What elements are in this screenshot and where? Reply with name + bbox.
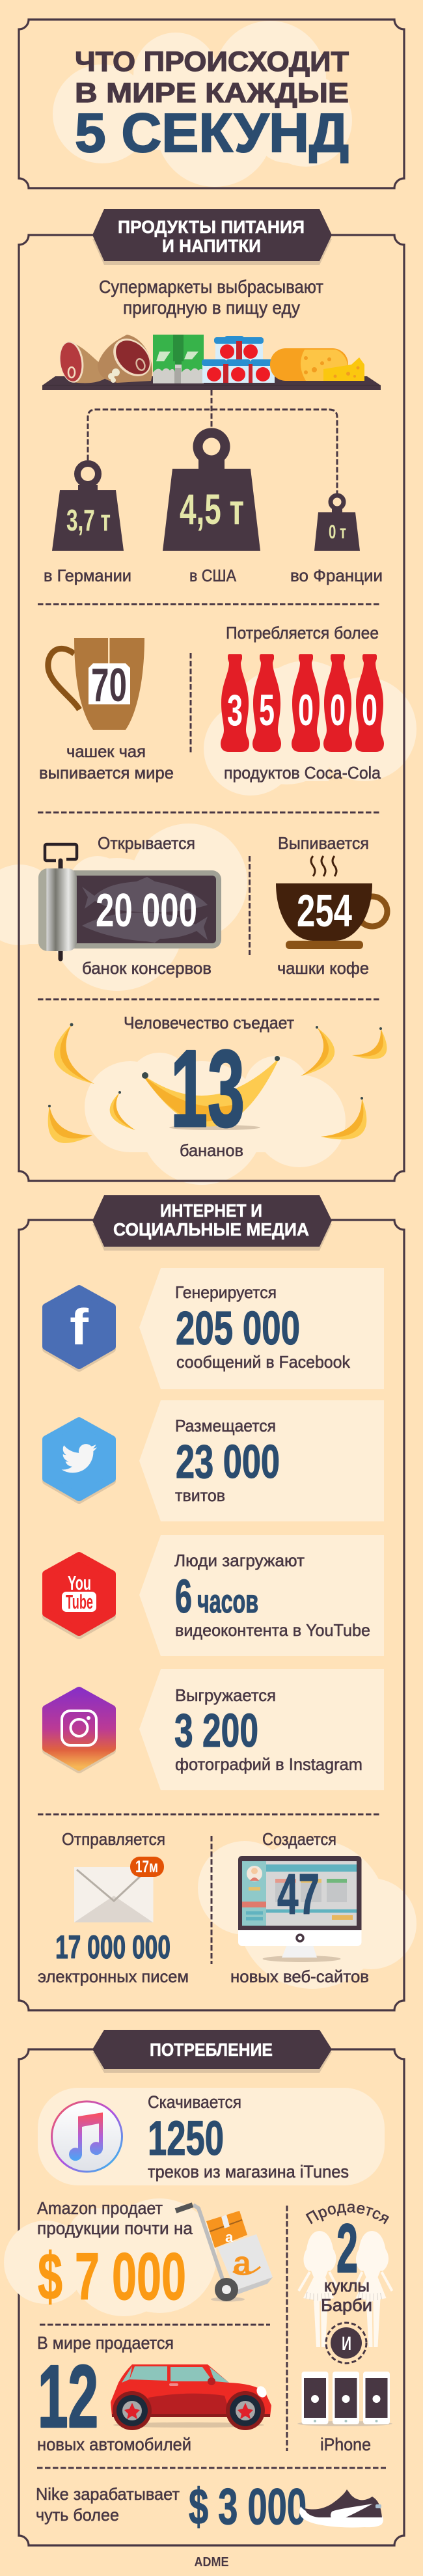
icon: and badge: И <box>342 2333 351 2355</box>
icon: coffee cup: 254 <box>297 885 352 936</box>
panel: internet and social media <box>19 1195 416 2010</box>
backdrop cloud: amazon <box>4 2198 217 2316</box>
amazon text <box>37 2198 193 2238</box>
itunes text: 1250 <box>148 2111 224 2165</box>
section heading: СОЦИАЛЬНЫЕ МЕДИА <box>113 1219 309 1240</box>
icon: cola bottles with digits: 3 <box>227 686 243 735</box>
panel: itunes <box>38 2088 385 2185</box>
icon: facebook <box>46 1289 112 1368</box>
email text: электронных писем <box>38 1967 189 1986</box>
credit: ADME: ADME <box>194 2555 229 2569</box>
barbie number: 2 <box>336 2210 358 2287</box>
icon: big banana <box>142 1056 280 1130</box>
icon: weight France <box>314 495 360 551</box>
cars text: новых автомобилей <box>37 2435 191 2454</box>
number 12: 12 <box>38 2347 98 2446</box>
icon: right doll <box>354 2231 392 2347</box>
icon: youtube: Tube <box>66 1590 93 1613</box>
facebook text <box>175 1282 351 1372</box>
banana heading: Человечество съедает <box>124 1013 294 1032</box>
icon: ham left <box>57 340 111 384</box>
amazon text: продукции почти на <box>37 2219 193 2238</box>
icon: envelope with badge <box>74 1857 164 1922</box>
instagram text: фотографий в Instagram <box>175 1754 362 1774</box>
amazon text: Amazon продает <box>37 2198 163 2218</box>
panel: food and drinks <box>0 209 416 1185</box>
instagram text: Выгружается <box>175 1685 276 1705</box>
nike text: Nike зарабатывает <box>36 2484 180 2504</box>
youtube text: 6 <box>175 1571 192 1623</box>
icon: red car <box>111 2364 271 2430</box>
section frame <box>19 235 404 1181</box>
icon: tea cup <box>48 638 144 730</box>
icon: cola bottles with digits: 0 <box>298 686 314 735</box>
panel: facebook <box>46 1268 384 1389</box>
barbie text: куклы <box>324 2276 370 2295</box>
facebook text: сообщений в Facebook <box>176 1352 351 1372</box>
weight labels: во Франции <box>290 566 383 585</box>
intro text: пригодную в пищу еду <box>123 298 300 318</box>
section frame <box>19 1220 404 2010</box>
icon: weight USA <box>163 433 260 551</box>
coffee text: чашки кофе <box>277 958 369 978</box>
icon: amazon cart: a <box>233 2245 252 2281</box>
icon: amazon cart <box>176 2205 273 2302</box>
facebook text: Генерируется <box>175 1282 277 1302</box>
icon: iphones <box>297 2372 392 2426</box>
icon: itunes <box>52 2101 122 2172</box>
icon: monitor <box>238 1856 362 1962</box>
dashed scale connector <box>88 390 337 493</box>
weight labels: в Германии <box>44 566 131 585</box>
icon: cola bottles with digits: 0 <box>362 686 377 735</box>
weight labels: в США <box>189 566 237 585</box>
itunes text: Скачивается <box>148 2092 241 2112</box>
icon: shelf with food <box>42 331 381 390</box>
cola heading: Потребляется более <box>226 623 379 643</box>
title text: В МИРЕ КАЖДЫЕ <box>75 77 349 109</box>
tea text: выпивается мире <box>39 763 174 782</box>
icon: monitor: 47 <box>277 1862 320 1926</box>
section heading: И НАПИТКИ <box>162 236 261 256</box>
cars heading: В мире продается <box>37 2333 174 2353</box>
icon: coffee cup <box>276 856 387 949</box>
weight labels <box>44 566 383 585</box>
section heading: ПОТРЕБЛЕНИЕ <box>150 2040 273 2060</box>
email number: 17 000 000 <box>55 1929 171 1965</box>
icon: barbie silhouettes <box>299 2231 392 2347</box>
icon: cola bottles with digits: 5 <box>259 686 275 735</box>
icon: twitter <box>46 1421 112 1500</box>
intro text <box>99 277 323 318</box>
icon: youtube: You <box>68 1572 91 1594</box>
twitter text <box>175 1416 280 1505</box>
cans heading: Открывается <box>98 833 195 853</box>
icon: facebook: f <box>70 1298 89 1355</box>
twitter text: 23 000 <box>176 1436 280 1488</box>
icon: milk carton <box>153 335 204 383</box>
section heading: ПРОДУКТЫ ПИТАНИЯ <box>118 217 305 237</box>
icon: instagram <box>46 1691 112 1769</box>
icon: cheese <box>270 348 364 381</box>
youtube text: часов <box>197 1583 258 1620</box>
backdrop clouds: food section <box>0 661 416 1185</box>
icon: opened tin can: 20 000 <box>96 885 197 937</box>
icon: cola bottles with digits <box>221 654 384 752</box>
title text: 5 СЕКУНД <box>75 102 349 163</box>
icon: small bananas <box>48 1023 387 1143</box>
title panel <box>19 20 404 188</box>
section heading <box>92 2030 332 2073</box>
icon: nike shoe <box>299 2489 383 2527</box>
icon: cans <box>202 336 275 383</box>
panel: consumption <box>4 2030 405 2547</box>
icon: left doll <box>299 2231 338 2347</box>
title cloud backdrop <box>53 21 352 187</box>
icon: envelope with badge: 17м <box>135 1857 158 1876</box>
panel: instagram <box>46 1669 384 1790</box>
youtube text <box>174 1551 370 1640</box>
backdrop cloud: websites <box>198 1839 416 1989</box>
panel: twitter <box>46 1400 384 1521</box>
iphone text: iPhone <box>320 2435 371 2454</box>
title text <box>75 46 349 163</box>
twitter text: Размещается <box>175 1416 276 1435</box>
section heading: ИНТЕРНЕТ И <box>160 1200 262 1221</box>
itunes text <box>148 2092 349 2181</box>
icon: weight France: 0 т <box>329 521 346 543</box>
section frame <box>19 2049 404 2545</box>
icon: ham right <box>98 331 158 383</box>
icon: youtube <box>46 1556 112 1635</box>
nike text <box>36 2484 180 2525</box>
cans text: банок консервов <box>82 958 212 978</box>
icon: and badge <box>326 2323 366 2363</box>
amazon number: $ 7 000 <box>38 2239 186 2314</box>
icon: weight Germany <box>52 464 124 551</box>
instagram text <box>174 1685 362 1774</box>
title text: ЧТО ПРОИСХОДИТ <box>75 46 349 77</box>
youtube text: видеоконтента в YouTube <box>175 1620 370 1640</box>
section heading <box>92 209 332 265</box>
panel: youtube <box>46 1535 384 1656</box>
tea text: чашек чая <box>66 741 146 761</box>
section heading <box>92 1195 332 1251</box>
number 13: 13 <box>171 1027 245 1150</box>
icon: weight USA: 4,5 т <box>180 485 244 533</box>
banana text: бананов <box>180 1141 243 1160</box>
websites heading: Создается <box>262 1829 336 1849</box>
icon: cola bottles with digits: 0 <box>330 686 346 735</box>
barbie text: Барби <box>321 2295 372 2315</box>
intro text: Супермаркеты выбрасывают <box>99 277 323 297</box>
cola text: продуктов Coca-Cola <box>224 763 381 782</box>
coffee heading: Выпивается <box>278 833 369 853</box>
nike text: чуть более <box>36 2505 119 2525</box>
instagram text: 3 200 <box>174 1705 258 1757</box>
facebook text: 205 000 <box>176 1303 300 1355</box>
tea text <box>39 741 174 782</box>
email heading: Отправляется <box>62 1829 165 1849</box>
title frame <box>19 20 404 188</box>
barbie text <box>321 2276 372 2315</box>
itunes text: треков из магазина iTunes <box>148 2162 349 2181</box>
icon: weight Germany: 3,7 т <box>66 503 111 537</box>
barbie heading: Продается <box>306 2204 389 2224</box>
icon: amazon cart: a <box>225 2229 234 2245</box>
nike number: $ 3 000 <box>189 2478 307 2535</box>
youtube text: Люди загружают <box>174 1551 305 1570</box>
websites text: новых веб-сайтов <box>230 1967 369 1986</box>
icon: opened tin can <box>38 844 221 959</box>
icon: tea cup: 70 <box>91 659 127 712</box>
twitter text: твитов <box>175 1486 225 1505</box>
